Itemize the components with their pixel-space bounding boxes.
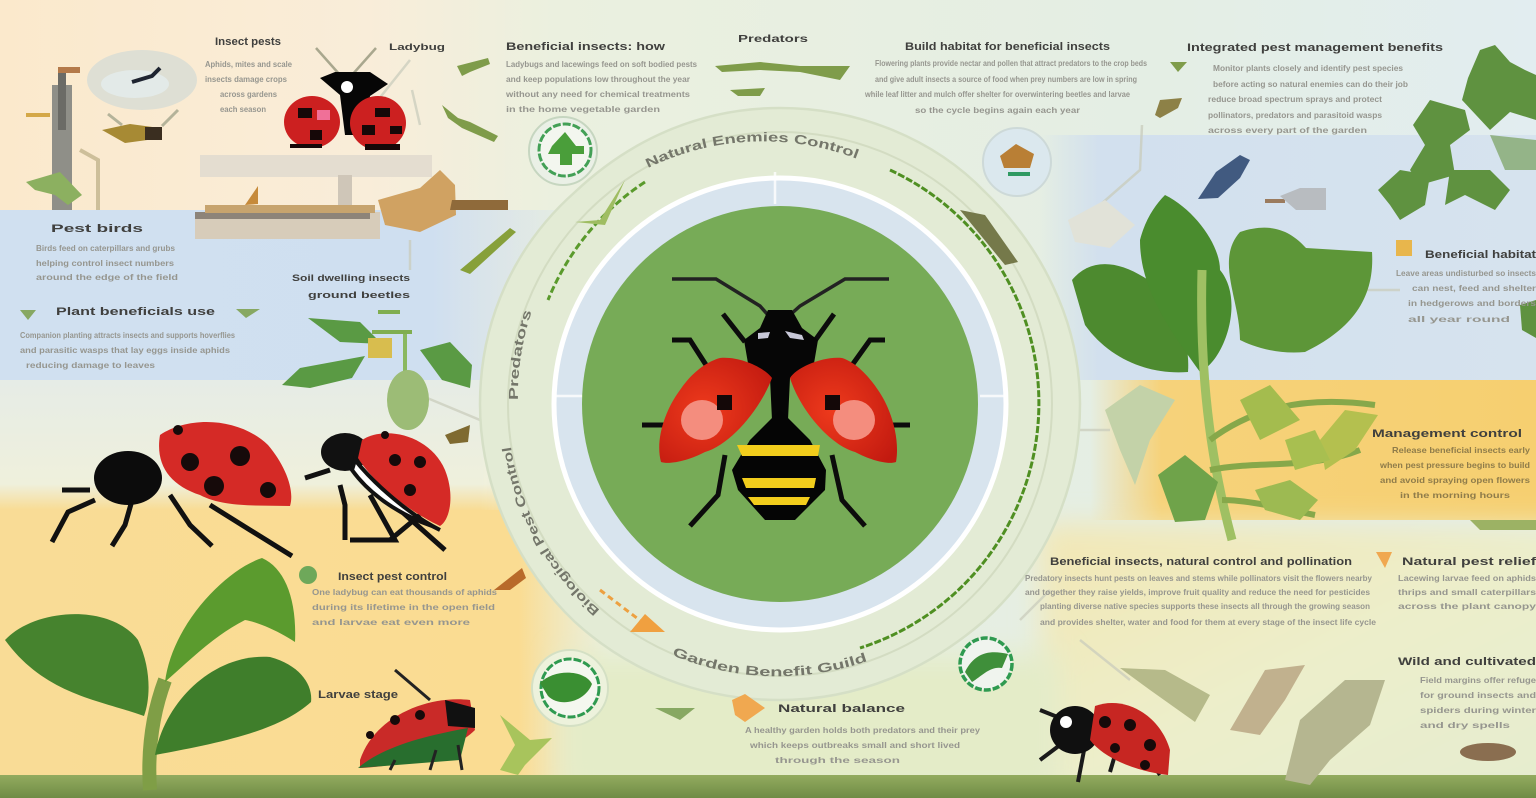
central ring diagram xyxy=(478,106,1082,701)
body xyxy=(159,422,291,506)
text: lower far right: thrips and small caterpillars xyxy=(1398,587,1536,597)
leaf top xyxy=(1140,195,1231,372)
text: soil label xyxy=(292,273,410,301)
body xyxy=(358,433,450,526)
inner pale disc xyxy=(554,178,1006,630)
ring label left: Predators xyxy=(508,310,531,399)
text: life cycle centre bottom: A healthy garden holds both predators and their prey xyxy=(745,725,980,735)
icon: badge bottom left xyxy=(532,650,608,726)
text: beneficial insects: Beneficial insects: how xyxy=(506,41,666,53)
text: beneficial insects: without any need for chemical treatments xyxy=(505,89,690,99)
legs xyxy=(305,470,445,550)
text: lower far right: Natural pest relief xyxy=(1402,556,1536,568)
text: insect pests: Aphids, mites and scale xyxy=(205,59,292,69)
lower leaves xyxy=(1158,455,1218,522)
icon: badge top right xyxy=(983,128,1051,196)
text: yellow band right: when pest pressure begins to build xyxy=(1379,460,1530,470)
icon: badge top left xyxy=(529,117,597,185)
label: predators: Predators xyxy=(738,34,809,45)
spots xyxy=(173,425,276,498)
text: life cycle centre bottom xyxy=(745,703,980,765)
head xyxy=(94,451,162,505)
wing highlights and spots xyxy=(681,400,723,440)
text: habitat benefits: while leaf litter and mulch offer shelter for overwintering beetles and larvae xyxy=(864,89,1130,99)
text: integrated approach: across every part of the garden xyxy=(1208,125,1367,135)
text: integrated approach: reduce broad spectrum sprays and protect xyxy=(1208,94,1382,104)
antennae xyxy=(672,279,889,315)
spots xyxy=(290,108,402,150)
text: insect pest control: One ladybug can eat thousands of aphids xyxy=(312,587,497,597)
large ladybug left xyxy=(52,422,292,556)
text: insect pests: each season xyxy=(220,104,266,114)
text: pest birds: Birds feed on caterpillars and grubs xyxy=(36,243,175,253)
top right leaf xyxy=(165,558,295,682)
text: bottom far right: spiders during winter xyxy=(1420,705,1536,715)
right wing xyxy=(350,96,406,150)
text: plant beneficials: Companion planting attracts insects and supports hoverflies xyxy=(20,330,235,340)
text: bottom far right: for ground insects and xyxy=(1420,690,1536,700)
central ladybug xyxy=(642,279,910,526)
bug: grey fly xyxy=(1265,188,1326,210)
head xyxy=(321,433,369,471)
ring label top: Natural Enemies Control xyxy=(645,132,859,168)
head xyxy=(320,72,388,135)
ring label lower left: Biological Pest Control xyxy=(502,448,600,616)
illustration: grasshopper xyxy=(102,110,178,143)
big plant right xyxy=(1068,195,1378,540)
text: insect pests: across gardens xyxy=(220,89,277,99)
pale bug 2 xyxy=(1230,665,1305,735)
clover foliage top right xyxy=(1378,45,1536,338)
small weed xyxy=(500,715,552,775)
lower foliage xyxy=(1210,402,1375,515)
head and thorax xyxy=(744,310,818,420)
text: habitat benefits: and give adult insects a source of food when prey numbers are low in spring xyxy=(875,74,1137,84)
label: ladybug: Ladybug xyxy=(389,42,445,52)
text: life cycle centre bottom: through the season xyxy=(775,755,900,765)
pale herb xyxy=(1068,200,1135,248)
antennae xyxy=(316,48,376,75)
bug: green mantis left xyxy=(460,228,516,274)
left leaf xyxy=(5,614,149,716)
ticks xyxy=(556,172,1006,396)
text: blue band right: all year round xyxy=(1408,314,1510,324)
text: yellow band right xyxy=(1372,428,1530,500)
text: yellow band right: in the morning hours xyxy=(1400,490,1510,500)
large seedling lower left xyxy=(5,558,311,790)
yellow stripes xyxy=(737,445,820,505)
text: pest birds xyxy=(36,223,178,282)
text: beneficial insects: Ladybugs and lacewings feed on soft bodied pests xyxy=(506,59,697,69)
text: plant beneficials: reducing damage to leaves xyxy=(26,360,155,370)
text: soil label: Soil dwelling insects xyxy=(292,273,410,284)
orange markers xyxy=(494,552,1392,722)
text: insect pest control: during its lifetime in the open field xyxy=(312,602,495,612)
connector lines xyxy=(378,60,1400,680)
text: habitat benefits: so the cycle begins again each year xyxy=(915,105,1081,115)
sprout in centre left xyxy=(282,312,472,444)
orange arc xyxy=(600,590,650,628)
text: insect pest control: Insect pest control xyxy=(338,571,447,583)
icon: badge bottom right xyxy=(960,638,1012,690)
text: blue band right: in hedgerows and borders xyxy=(1408,298,1536,308)
text: habitat benefits xyxy=(864,41,1147,115)
highlight xyxy=(317,110,330,120)
text: beneficial insects: and keep populations low throughout the year xyxy=(506,74,691,84)
ring label bottom: Garden Benefit Guild xyxy=(674,648,866,676)
eyes xyxy=(758,331,804,340)
small ladybug top xyxy=(284,48,406,150)
text: lower right main: and provides shelter, water and food for them at every stage of the insect life cycle xyxy=(1040,617,1376,627)
legs and antennae xyxy=(52,490,292,556)
text: insect pest control xyxy=(312,571,497,627)
ladybug second left xyxy=(305,431,450,550)
bug: brown insect right of top heading xyxy=(1155,98,1182,118)
ground strip xyxy=(0,775,1536,798)
orange bug marker xyxy=(1396,240,1412,256)
text: soil label: ground beetles xyxy=(308,290,410,301)
green arc left xyxy=(548,182,645,300)
text: lower right main: planting diverse native species supports these insects all through the growing season xyxy=(1040,601,1370,611)
green disc xyxy=(582,206,978,602)
text: lower far right: Lacewing larvae feed on aphids xyxy=(1398,573,1536,583)
green arc right xyxy=(860,170,1039,648)
bugs bottom right xyxy=(1120,665,1516,785)
bug: blue beetle xyxy=(1198,155,1250,199)
stem xyxy=(1202,270,1232,540)
leaf left xyxy=(1072,264,1188,372)
text: lower far right xyxy=(1398,556,1536,611)
text: lower right main xyxy=(1025,556,1376,627)
text: integrated approach: before acting so natural enemies can do their job xyxy=(1213,79,1408,89)
text: habitat benefits: Flowering plants provide nectar and pollen that attract predators to the crop beds xyxy=(875,58,1147,68)
text: pest birds: Pest birds xyxy=(51,223,143,235)
pale bug 1 xyxy=(1120,668,1210,722)
text: insect pests: insects damage crops xyxy=(205,74,287,84)
leaf right xyxy=(1229,228,1372,353)
text: lower far right: across the plant canopy xyxy=(1398,601,1536,611)
text: yellow band right: Release beneficial insects early xyxy=(1392,445,1530,455)
text: blue band right: Beneficial habitat xyxy=(1425,249,1536,261)
text: plant beneficials xyxy=(20,306,235,370)
ladybug lower centre left xyxy=(358,670,475,770)
text: beneficial insects: in the home vegetable garden xyxy=(506,104,660,114)
inner band line xyxy=(508,132,1052,676)
text: blue band right: can nest, feed and shelter xyxy=(1412,283,1536,293)
text: larvae label: Larvae stage xyxy=(318,689,398,701)
text: blue band right xyxy=(1396,249,1536,324)
text: bottom far right xyxy=(1398,656,1536,730)
text: integrated approach: pollinators, predators and parasitoid wasps xyxy=(1208,110,1382,120)
text: insect pests xyxy=(205,36,292,114)
left wing xyxy=(284,96,340,148)
text: habitat benefits: Build habitat for beneficial insects xyxy=(905,41,1110,53)
legs xyxy=(642,314,910,526)
illustration: insect bubble xyxy=(87,50,197,110)
right wing xyxy=(790,358,897,463)
outer pale ring xyxy=(480,108,1080,700)
text: lower right main: and together they raise yields, improve fruit quality and reduce the need for pesticides xyxy=(1025,587,1370,597)
orange marker xyxy=(630,614,665,632)
text: yellow band right: Management control xyxy=(1372,428,1522,440)
text: insect pest control: and larvae eat even more xyxy=(312,617,470,627)
text: plant beneficials: and parasitic wasps that lay eggs inside aphids xyxy=(20,345,230,355)
white stripe xyxy=(352,460,440,530)
right leaf xyxy=(155,657,311,755)
text: bottom far right: Field margins offer refuge xyxy=(1420,675,1536,685)
ladybug lower right xyxy=(1040,703,1170,782)
spots xyxy=(381,431,426,496)
text: life cycle centre bottom: Natural balance xyxy=(778,703,905,715)
text: blue band right: Leave areas undisturbed so insects xyxy=(1396,268,1536,278)
left wing xyxy=(659,358,772,463)
abdomen xyxy=(732,410,826,520)
green markers xyxy=(20,180,1536,720)
dried plant xyxy=(1285,680,1385,785)
bug: top green insects xyxy=(442,58,1187,142)
text: insect pests: Insect pests xyxy=(215,36,281,48)
illustration: twig with insect top left xyxy=(26,70,98,210)
text: integrated approach: Integrated pest management benefits xyxy=(1187,42,1443,54)
text: integrated approach xyxy=(1187,42,1443,135)
text: life cycle centre bottom: which keeps outbreaks small and short lived xyxy=(749,740,960,750)
text: pest birds: around the edge of the field xyxy=(36,272,178,282)
text: lower right main: Beneficial insects, natural control and pollination xyxy=(1050,556,1352,568)
text: integrated approach: Monitor plants closely and identify pest species xyxy=(1213,63,1403,73)
text: pest birds: helping control insect numbers xyxy=(36,258,174,268)
small dark bug xyxy=(1460,743,1516,761)
text: plant beneficials: Plant beneficials use xyxy=(56,306,215,318)
text: beneficial insects xyxy=(505,41,697,114)
text: bottom far right: Wild and cultivated xyxy=(1398,656,1536,668)
illustration: shelf and soil xyxy=(195,155,508,239)
text: bottom far right: and dry spells xyxy=(1420,720,1510,730)
text: lower right main: Predatory insects hunt pests on leaves and stems while pollinators visit the flowers nearby xyxy=(1025,573,1372,583)
text: yellow band right: and avoid spraying open flowers xyxy=(1380,475,1530,485)
